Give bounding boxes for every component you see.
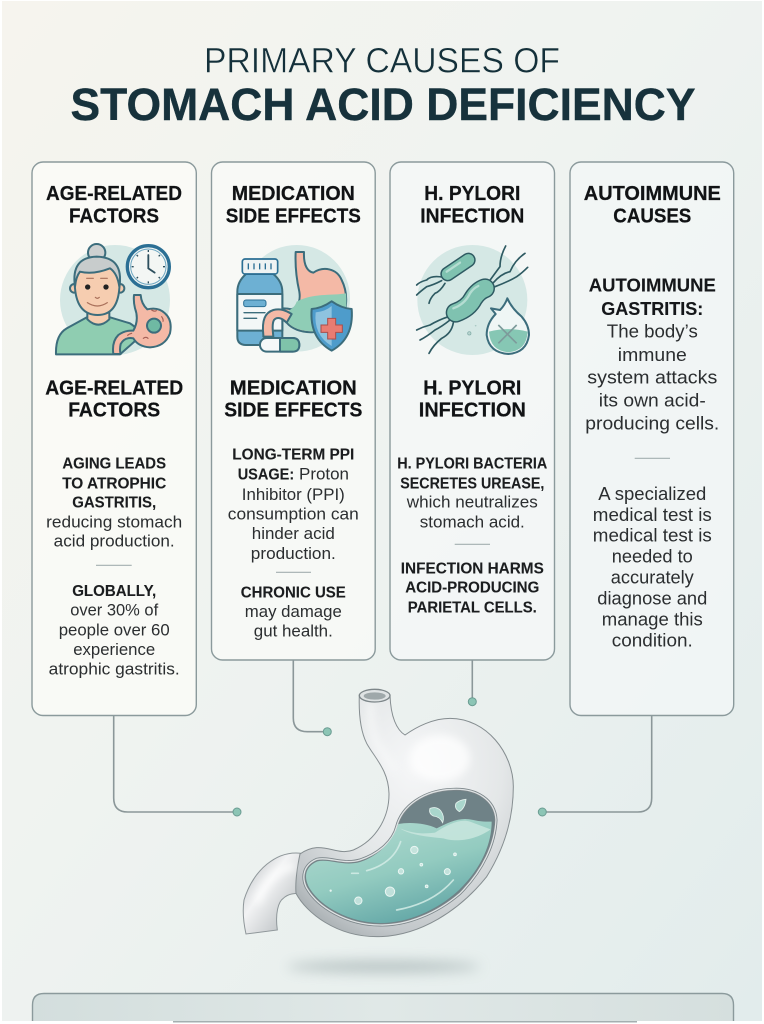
text: diagnosis: A specialized (598, 483, 706, 504)
text: parietal cell harm: INFECTION HARMS (401, 560, 544, 577)
text: urease secretion (397, 456, 547, 531)
connector: autoimmune to stomach (538, 715, 652, 816)
text: global prevalence (49, 583, 180, 678)
text: autoimmune gastritis: The body’s (607, 321, 698, 342)
text: long-term ppi usage: Proton (299, 464, 349, 483)
panel: h. pylori infection (390, 162, 554, 660)
gastric chamber (304, 789, 496, 925)
panel: autoimmune causes (570, 162, 734, 716)
title (70, 41, 696, 130)
title line: primary causes: PRIMARY CAUSES OF (204, 41, 560, 80)
heading: autoimmune causes: CAUSES (613, 204, 691, 227)
text: diagnosis: needed to (612, 546, 693, 567)
text: long-term ppi usage: LONG-TERM PPI (232, 446, 354, 463)
text: global prevalence: people over 60 (59, 620, 170, 639)
stomach highlight (410, 735, 470, 782)
text: global prevalence: GLOBALLY, (72, 583, 156, 600)
heading: medication side effects: SIDE EFFECTS (226, 204, 361, 227)
text: autoimmune gastritis: GASTRITIS: (601, 299, 703, 319)
text: urease secretion: stomach acid. (420, 512, 525, 531)
text: long-term ppi usage: Inhibitor (PPI) (242, 485, 345, 504)
liquid highlights (352, 842, 453, 910)
heading: h. pylori infection: H. PYLORI (424, 182, 520, 205)
icon: h. pylori bacteria and acid drop (417, 245, 529, 355)
text: aging leads to atrophic gastritis: acid production. (54, 532, 175, 551)
connector: medication to stomach (293, 660, 331, 736)
heading: medication side effects (226, 182, 361, 227)
bottom panel (32, 994, 734, 1022)
text: diagnosis: accurately (611, 566, 694, 587)
panel: medication side effects (212, 162, 375, 660)
subheading: medication side effects: MEDICATION (230, 376, 357, 399)
text: urease secretion: which neutralizes (406, 493, 538, 512)
text: autoimmune gastritis: its own acid- (599, 390, 706, 411)
text: autoimmune gastritis: AUTOIMMUNE (589, 276, 716, 296)
text: long-term ppi usage: hinder acid (252, 524, 335, 543)
text: parietal cell harm: PARIETAL CELLS. (408, 599, 537, 616)
heading: age-related factors: FACTORS (69, 204, 159, 227)
acid splash drops (430, 799, 466, 823)
text: chronic use: gut health. (254, 621, 333, 640)
text: diagnosis: diagnose and (597, 587, 707, 608)
text: autoimmune gastritis: immune (618, 344, 687, 365)
text: autoimmune gastritis: producing cells. (585, 412, 719, 433)
text: autoimmune gastritis: system attacks (587, 367, 717, 388)
heading: medication side effects: MEDICATION (232, 182, 355, 205)
text: aging leads to atrophic gastritis: reducing stomach (46, 512, 182, 531)
esophagus highlight (371, 705, 393, 768)
subheading: medication side effects: SIDE EFFECTS (224, 399, 362, 422)
text: global prevalence: atrophic gastritis. (49, 659, 180, 678)
text: aging leads to atrophic gastritis (46, 456, 182, 551)
text: long-term ppi usage: production. (251, 544, 336, 563)
text: aging leads to atrophic gastritis: TO ATROPHIC (62, 475, 166, 492)
text: long-term ppi usage (228, 446, 359, 563)
text: diagnosis: medical test is (593, 504, 712, 525)
subheading: age-related factors: FACTORS (68, 399, 160, 422)
text: chronic use: CHRONIC USE (241, 584, 346, 601)
text: autoimmune gastritis (585, 276, 719, 433)
heading: h. pylori infection: INFECTION (420, 204, 524, 227)
text: long-term ppi usage: USAGE: (238, 466, 294, 483)
heading: autoimmune causes: AUTOIMMUNE (584, 182, 721, 205)
subheading: h. pylori infection (419, 376, 526, 422)
bubbles (330, 846, 456, 904)
text: diagnosis (593, 483, 712, 651)
text: urease secretion: SECRETES UREASE, (400, 475, 544, 492)
text: global prevalence: over 30% of (70, 601, 158, 620)
icon: elderly woman, clock and stomach (56, 244, 171, 355)
duodenum (243, 853, 302, 934)
text: urease secretion: H. PYLORI BACTERIA (397, 456, 547, 473)
panel: age-related factors (32, 162, 196, 716)
subheading: h. pylori infection: H. PYLORI (423, 376, 521, 399)
text: parietal cell harm: ACID-PRODUCING (405, 580, 539, 597)
subheading: age-related factors (45, 376, 183, 422)
text: aging leads to atrophic gastritis: AGING LEADS (62, 456, 166, 473)
text: aging leads to atrophic gastritis: GASTRITIS, (72, 495, 156, 512)
text: global prevalence: experience (73, 640, 155, 659)
text: diagnosis: condition. (612, 630, 693, 651)
text: long-term ppi usage: consumption can (228, 505, 359, 524)
heading: autoimmune causes (584, 182, 721, 227)
illustration: stomach with low acid (243, 689, 513, 972)
text: parietal cell harm (401, 560, 544, 616)
shadow under stomach (287, 961, 480, 972)
liquid surface (400, 821, 491, 840)
heading: age-related factors (46, 182, 182, 227)
title line: stomach acid deficiency: STOMACH ACID DEFICIENCY (70, 79, 696, 130)
connector: age-related to stomach (114, 715, 241, 816)
heading: age-related factors: AGE-RELATED (46, 182, 182, 205)
text: chronic use (241, 584, 346, 640)
acid liquid (306, 819, 492, 923)
text: chronic use: may damage (245, 602, 342, 621)
subheading: h. pylori infection: INFECTION (419, 399, 526, 422)
subheading: age-related factors: AGE-RELATED (45, 376, 183, 399)
esophagus opening (359, 689, 390, 702)
text: diagnosis: medical test is (593, 525, 712, 546)
icon: medicine bottle, stomach and shield (237, 245, 352, 352)
connector: h. pylori to stomach (468, 660, 476, 706)
heading: h. pylori infection (420, 182, 524, 227)
subheading: medication side effects (224, 376, 362, 422)
text: diagnosis: manage this (602, 609, 703, 630)
duodenum highlight (258, 867, 292, 900)
stomach wall (296, 695, 513, 937)
